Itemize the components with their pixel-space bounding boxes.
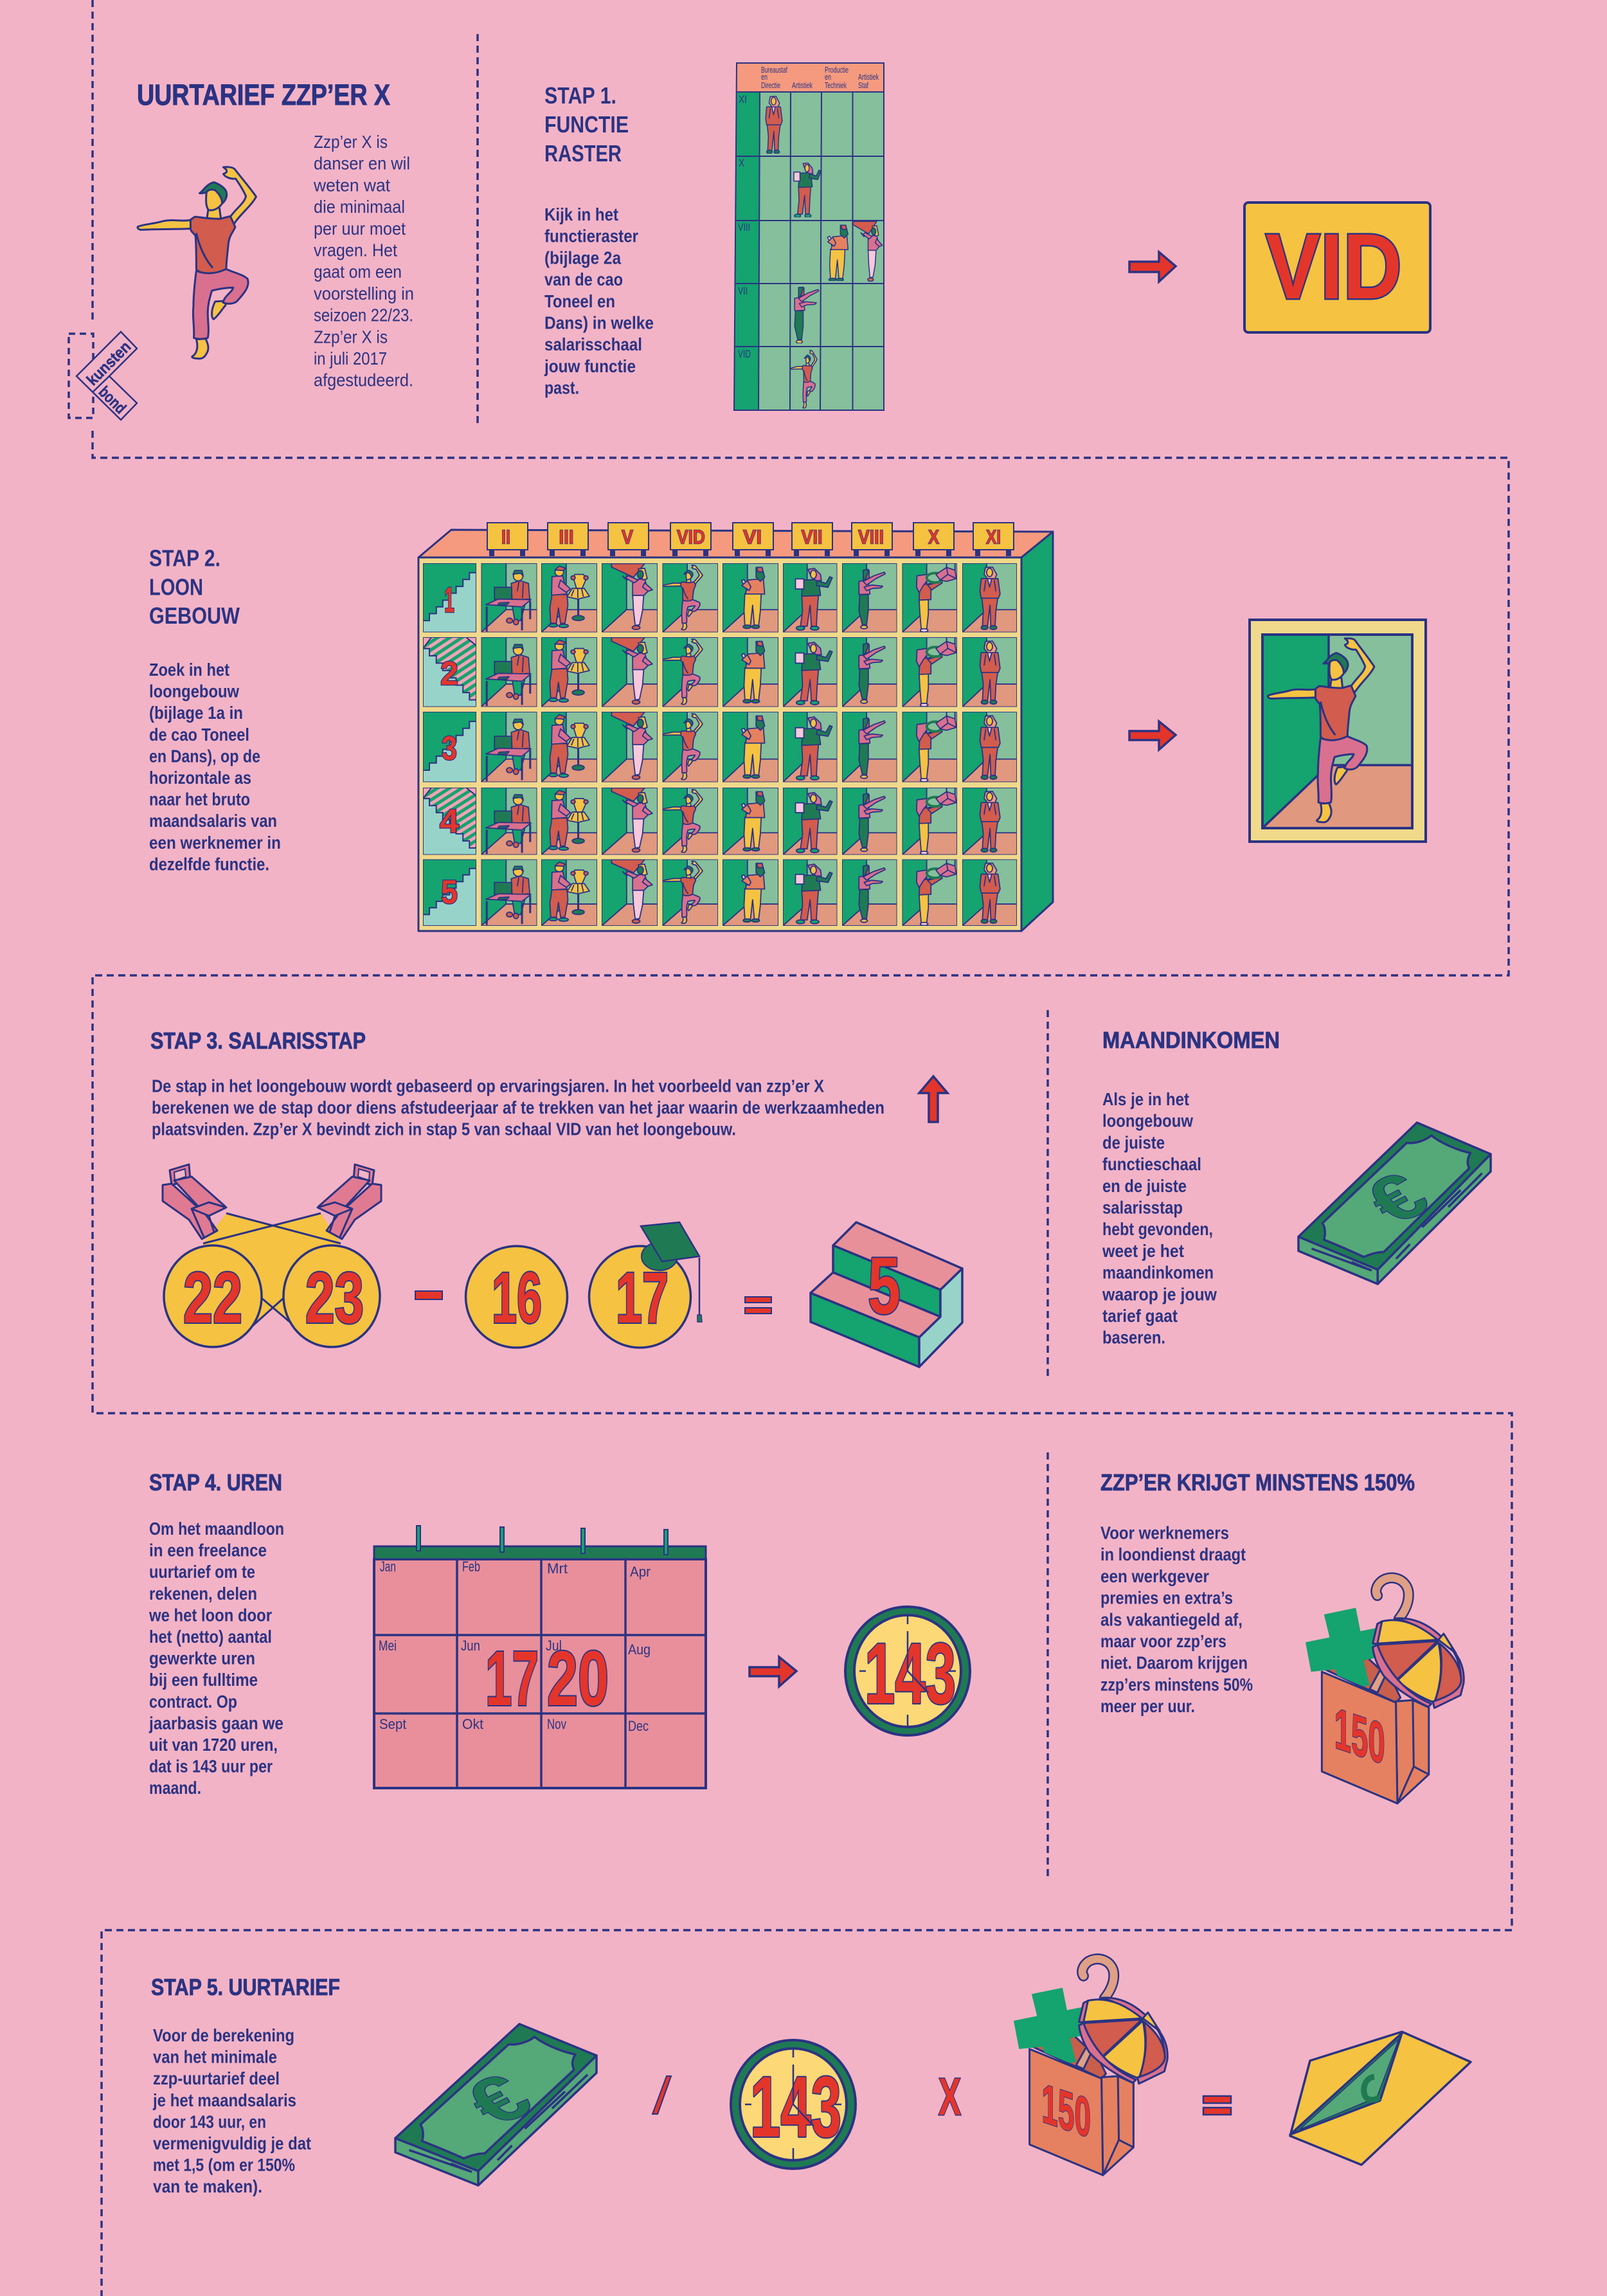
illustration: calendar: Dec	[628, 1718, 649, 1734]
text: stap 1: Toneel en	[544, 291, 615, 311]
illustration: calendar: 20	[547, 1634, 609, 1722]
heading: stap 1: STAP 1.	[544, 82, 616, 109]
text: stap 4: uurtarief om te	[149, 1562, 255, 1582]
illustration: calendar: Sept	[379, 1716, 406, 1732]
cells: row 5	[481, 859, 1017, 926]
illustration: loongebouw: XI	[986, 526, 1001, 548]
text: 150%: zzp’ers minstens 50%	[1100, 1674, 1253, 1694]
illustration: loongebouw: V	[622, 526, 633, 548]
heading: stap 5: STAP 5. UURTARIEF	[151, 1974, 340, 2000]
cells: row 3	[481, 712, 1017, 782]
text: stap 4: Om het maandloon	[149, 1519, 284, 1539]
illustration: calendar: Apr	[630, 1564, 651, 1580]
text: stap 2: maandsalaris van	[149, 811, 277, 831]
text: stap 3	[152, 1076, 884, 1139]
text: stap 2: en Dans), op de	[149, 746, 260, 766]
text: stap 1: van de cao	[544, 269, 623, 289]
text: stap 1: Kijk in het	[544, 204, 618, 224]
icon: VID sign: VID	[1266, 215, 1402, 318]
chart: functieraster: Staf	[858, 80, 868, 90]
illustration: calendar: Mrt	[547, 1560, 568, 1577]
circle: 16	[465, 1246, 567, 1348]
text: maandinkomen: tarief gaat	[1102, 1306, 1178, 1326]
scale tags	[487, 523, 1014, 556]
illustration: loongebouw	[418, 523, 1053, 931]
heading: stap 1: RASTER	[544, 140, 622, 167]
text: 150%: als vakantiegeld af,	[1100, 1609, 1243, 1629]
illustration: loongebouw: VID	[677, 526, 705, 548]
title: UURTARIEF ZZP’ER X	[137, 78, 390, 111]
panel: maandinkomen	[1102, 1027, 1491, 1348]
text: stap 2: horizontale as	[149, 768, 251, 788]
text: maandinkomen	[1102, 1089, 1217, 1348]
circle: 17 with graduation cap	[589, 1222, 702, 1348]
intro text	[313, 132, 414, 390]
text: 150%: Voor werknemers	[1100, 1523, 1229, 1543]
circle: 17 with graduation cap: 17	[616, 1258, 669, 1338]
chart: functieraster: Artistiek	[858, 72, 879, 82]
text: stap 4: gewerkte uren	[149, 1649, 255, 1668]
text: stap 4: maand.	[149, 1778, 201, 1798]
text: maandinkomen: hebt gevonden,	[1102, 1219, 1213, 1239]
minus	[415, 1291, 442, 1299]
text: maandinkomen: weet je het	[1102, 1241, 1184, 1261]
text: stap 4: uit van 1720 uren,	[149, 1735, 278, 1755]
illustration: calendar: Nov	[547, 1716, 566, 1732]
text: stap 5: zzp-uurtarief deel	[153, 2068, 280, 2088]
icon: shopping bag with umbrella	[1014, 1959, 1167, 2175]
logo: kunstenbond: kunsten	[83, 338, 134, 389]
intro text: gaat om een	[314, 262, 402, 282]
text: stap 1: salarisschaal	[544, 334, 642, 354]
text: stap 1	[544, 204, 654, 398]
chart: functieraster: XI	[739, 93, 747, 105]
illustration: seizoen 22/23: 23	[305, 1258, 364, 1338]
stair cells: 5	[441, 874, 458, 911]
arrow	[750, 1657, 796, 1686]
illustration: calendar: Jan	[380, 1559, 396, 1575]
heading: stap 2: GEBOUW	[149, 602, 240, 629]
heading: stap 2	[149, 545, 240, 629]
chart: functieraster	[734, 63, 884, 410]
icon: VID sign	[1244, 203, 1430, 332]
text: stap 4: jaarbasis gaan we	[148, 1713, 283, 1733]
text: maandinkomen: en de juiste	[1102, 1176, 1187, 1196]
intro text: weten wat	[313, 175, 390, 195]
heading: stap 1: FUNCTIE	[544, 111, 629, 138]
text: stap 5: vermenigvuldig je dat	[153, 2133, 311, 2153]
text: stap 2: een werknemer in	[149, 833, 281, 853]
heading: stap 2: STAP 2.	[149, 545, 220, 571]
illustration: calendar: Jul	[546, 1638, 562, 1654]
text: stap 5: met 1,5 (om er 150%	[153, 2155, 295, 2175]
panel: stap 5	[151, 1959, 1471, 2196]
logo: kunstenbond: bond	[95, 383, 129, 417]
panel: stap 2	[149, 523, 1426, 931]
illustration: calendar: Feb	[462, 1559, 480, 1575]
text: maandinkomen: de juiste	[1102, 1132, 1165, 1152]
icon: stairs step 5	[811, 1222, 962, 1367]
text: stap 5: Voor de berekening	[153, 2025, 294, 2045]
text: stap 5: van te maken).	[153, 2176, 262, 2196]
panel: zzp'er krijgt minstens 150%	[1100, 1469, 1464, 1803]
arrow	[1129, 252, 1176, 282]
illustration: calendar: Okt	[462, 1716, 483, 1732]
text: stap 1: past.	[544, 378, 579, 398]
stair cells: 3	[442, 730, 457, 768]
panel: stap 4	[148, 1469, 970, 1798]
text: stap 3: De stap in het loongebouw wordt gebaseerd op ervaringsjaren. In het voorbeeld van zzp’er X	[152, 1076, 825, 1096]
cells: row 4	[481, 788, 1017, 855]
heading: stap 3: STAP 3. SALARISSTAP	[150, 1027, 366, 1054]
cells: row 2	[481, 637, 1017, 707]
illustration: loongebouw: II	[501, 526, 510, 548]
chart: functieraster: Productie	[825, 65, 848, 75]
text: stap 2: dezelfde functie.	[149, 854, 269, 874]
stair cells: 4	[440, 803, 459, 840]
text: 150%: niet. Daarom krijgen	[1100, 1653, 1248, 1673]
intro text: per uur moet	[314, 219, 406, 239]
intro text: vragen. Het	[314, 240, 397, 260]
operator: divide	[652, 2076, 671, 2114]
intro text: voorstelling in	[314, 284, 414, 303]
text: stap 1: (bijlage 2a	[544, 248, 622, 267]
intro text: die minimaal	[314, 197, 405, 217]
heading: stap 2: LOON	[149, 574, 203, 601]
text: stap 5	[152, 2025, 311, 2196]
text: stap 5: van het minimale	[153, 2047, 277, 2067]
chart: functieraster: Artistiek	[792, 80, 812, 90]
operator: times: X	[938, 2068, 961, 2126]
stair cells: 2	[440, 655, 458, 692]
text: stap 1: functieraster	[544, 226, 638, 246]
intro text: Zzp’er X is	[314, 132, 388, 152]
stair cells: 1	[444, 579, 454, 620]
text: maandinkomen: maandinkomen	[1102, 1263, 1214, 1283]
panel: intro	[137, 78, 414, 390]
panel: stap 3	[150, 1027, 962, 1367]
intro text: in juli 2017	[314, 348, 387, 368]
illustration: seizoen 22/23: 22	[183, 1258, 242, 1338]
icon: money	[395, 2024, 597, 2185]
icon: shopping bag with umbrella	[1306, 1578, 1464, 1803]
stair cells	[423, 563, 476, 926]
icon: clock 143	[845, 1607, 970, 1735]
text: maandinkomen: salarisstap	[1102, 1197, 1183, 1218]
cells: row 1	[481, 563, 1017, 633]
heading: maandinkomen: MAANDINKOMEN	[1102, 1027, 1280, 1053]
text: stap 4: bij een fulltime	[149, 1670, 258, 1690]
panel: stap 1	[544, 63, 1430, 410]
text: stap 2: loongebouw	[149, 682, 240, 701]
text: stap 2: Zoek in het	[149, 660, 229, 680]
text: stap 4: we het loon door	[148, 1605, 272, 1625]
intro text: seizoen 22/23.	[314, 305, 413, 325]
illustration: loongebouw: X	[928, 526, 939, 548]
text: stap 4: contract. Op	[149, 1692, 237, 1712]
logo: kunstenbond	[69, 332, 137, 420]
chart: functieraster: Bureaustaf	[761, 65, 787, 75]
text: stap 1: jouw functie	[544, 356, 636, 376]
illustration: loongebouw: III	[559, 526, 573, 548]
text: stap 4	[148, 1519, 284, 1798]
heading: stap 4: STAP 4. UREN	[149, 1469, 282, 1496]
illustration: calendar: Jun	[461, 1638, 480, 1654]
heading: stap 1	[544, 82, 629, 167]
illustration: calendar: Aug	[628, 1641, 651, 1658]
illustration: loongebouw: VII	[801, 526, 823, 548]
icon: money	[1298, 1123, 1491, 1284]
icon: stairs step 5: 5	[868, 1242, 901, 1331]
text: 150%: premies en extra’s	[1100, 1588, 1233, 1608]
text: stap 3: berekenen we de stap door diens afstudeerjaar af te trekken van het jaar waarin de werkzaamheden	[152, 1098, 884, 1117]
icon: framed dancer	[1250, 620, 1426, 842]
intro text: afgestudeerd.	[314, 370, 413, 390]
building body	[418, 530, 1053, 931]
text: maandinkomen: loongebouw	[1102, 1111, 1194, 1131]
text: 150%: maar voor zzp’ers	[1100, 1631, 1226, 1651]
equals	[745, 1297, 771, 1314]
text: stap 1: Dans) in welke	[544, 312, 654, 333]
icon: dancer	[138, 167, 256, 359]
chart: functieraster: en	[761, 72, 768, 82]
arrow	[1129, 721, 1176, 750]
text: maandinkomen: baseren.	[1102, 1328, 1165, 1348]
icon: envelope with euro	[1290, 2032, 1471, 2165]
circle: 16: 16	[492, 1258, 542, 1338]
illustration: calendar: Mei	[379, 1638, 397, 1654]
illustration: calendar: 17	[485, 1634, 539, 1722]
illustration: calendar	[374, 1526, 706, 1788]
text: stap 4: rekenen, delen	[149, 1584, 257, 1604]
chart: functieraster: Techniek	[825, 80, 847, 90]
illustration: loongebouw: VIII	[858, 526, 884, 548]
illustration: loongebouw: VI	[743, 526, 762, 548]
chart: functieraster: VID	[738, 348, 751, 360]
text: stap 2: naar het bruto	[149, 790, 250, 809]
text: 150%: in loondienst draagt	[1100, 1544, 1246, 1564]
text: stap 4: dat is 143 uur per	[149, 1757, 273, 1776]
text: 150%	[1100, 1523, 1253, 1716]
intro text: Zzp’er X is	[314, 327, 388, 347]
text: stap 5: je het maandsalaris	[152, 2090, 296, 2110]
operator: equals	[1203, 2096, 1231, 2115]
intro text: danser en wil	[314, 154, 410, 174]
text: 150%: een werkgever	[1100, 1566, 1209, 1586]
chart: functieraster: VII	[738, 285, 748, 297]
text: maandinkomen: waarop je jouw	[1102, 1284, 1217, 1304]
text: 150%: meer per uur.	[1100, 1696, 1195, 1716]
text: stap 5: door 143 uur, en	[153, 2111, 266, 2131]
heading: 150%: ZZP’ER KRIJGT MINSTENS 150%	[1100, 1469, 1415, 1496]
text: stap 4: het (netto) aantal	[149, 1627, 272, 1647]
arrow: up	[919, 1076, 947, 1122]
chart: functieraster: Directie	[761, 80, 780, 90]
text: maandinkomen: functieschaal	[1102, 1154, 1201, 1174]
text: stap 3: plaatsvinden. Zzp’er X bevindt zich in stap 5 van schaal VID van het loongebouw.	[152, 1119, 736, 1139]
text: stap 2	[149, 660, 281, 874]
icon: clock 143	[731, 2040, 856, 2169]
chart: functieraster: X	[739, 157, 744, 169]
illustration: seizoen 22/23	[163, 1164, 381, 1347]
text: stap 2: de cao Toneel	[149, 725, 249, 745]
text: stap 4: in een freelance	[149, 1541, 267, 1560]
chart: functieraster: VIII	[738, 221, 750, 233]
text: stap 2: (bijlage 1a in	[149, 703, 243, 723]
chart: functieraster: en	[825, 72, 831, 82]
text: maandinkomen: Als je in het	[1102, 1089, 1189, 1109]
